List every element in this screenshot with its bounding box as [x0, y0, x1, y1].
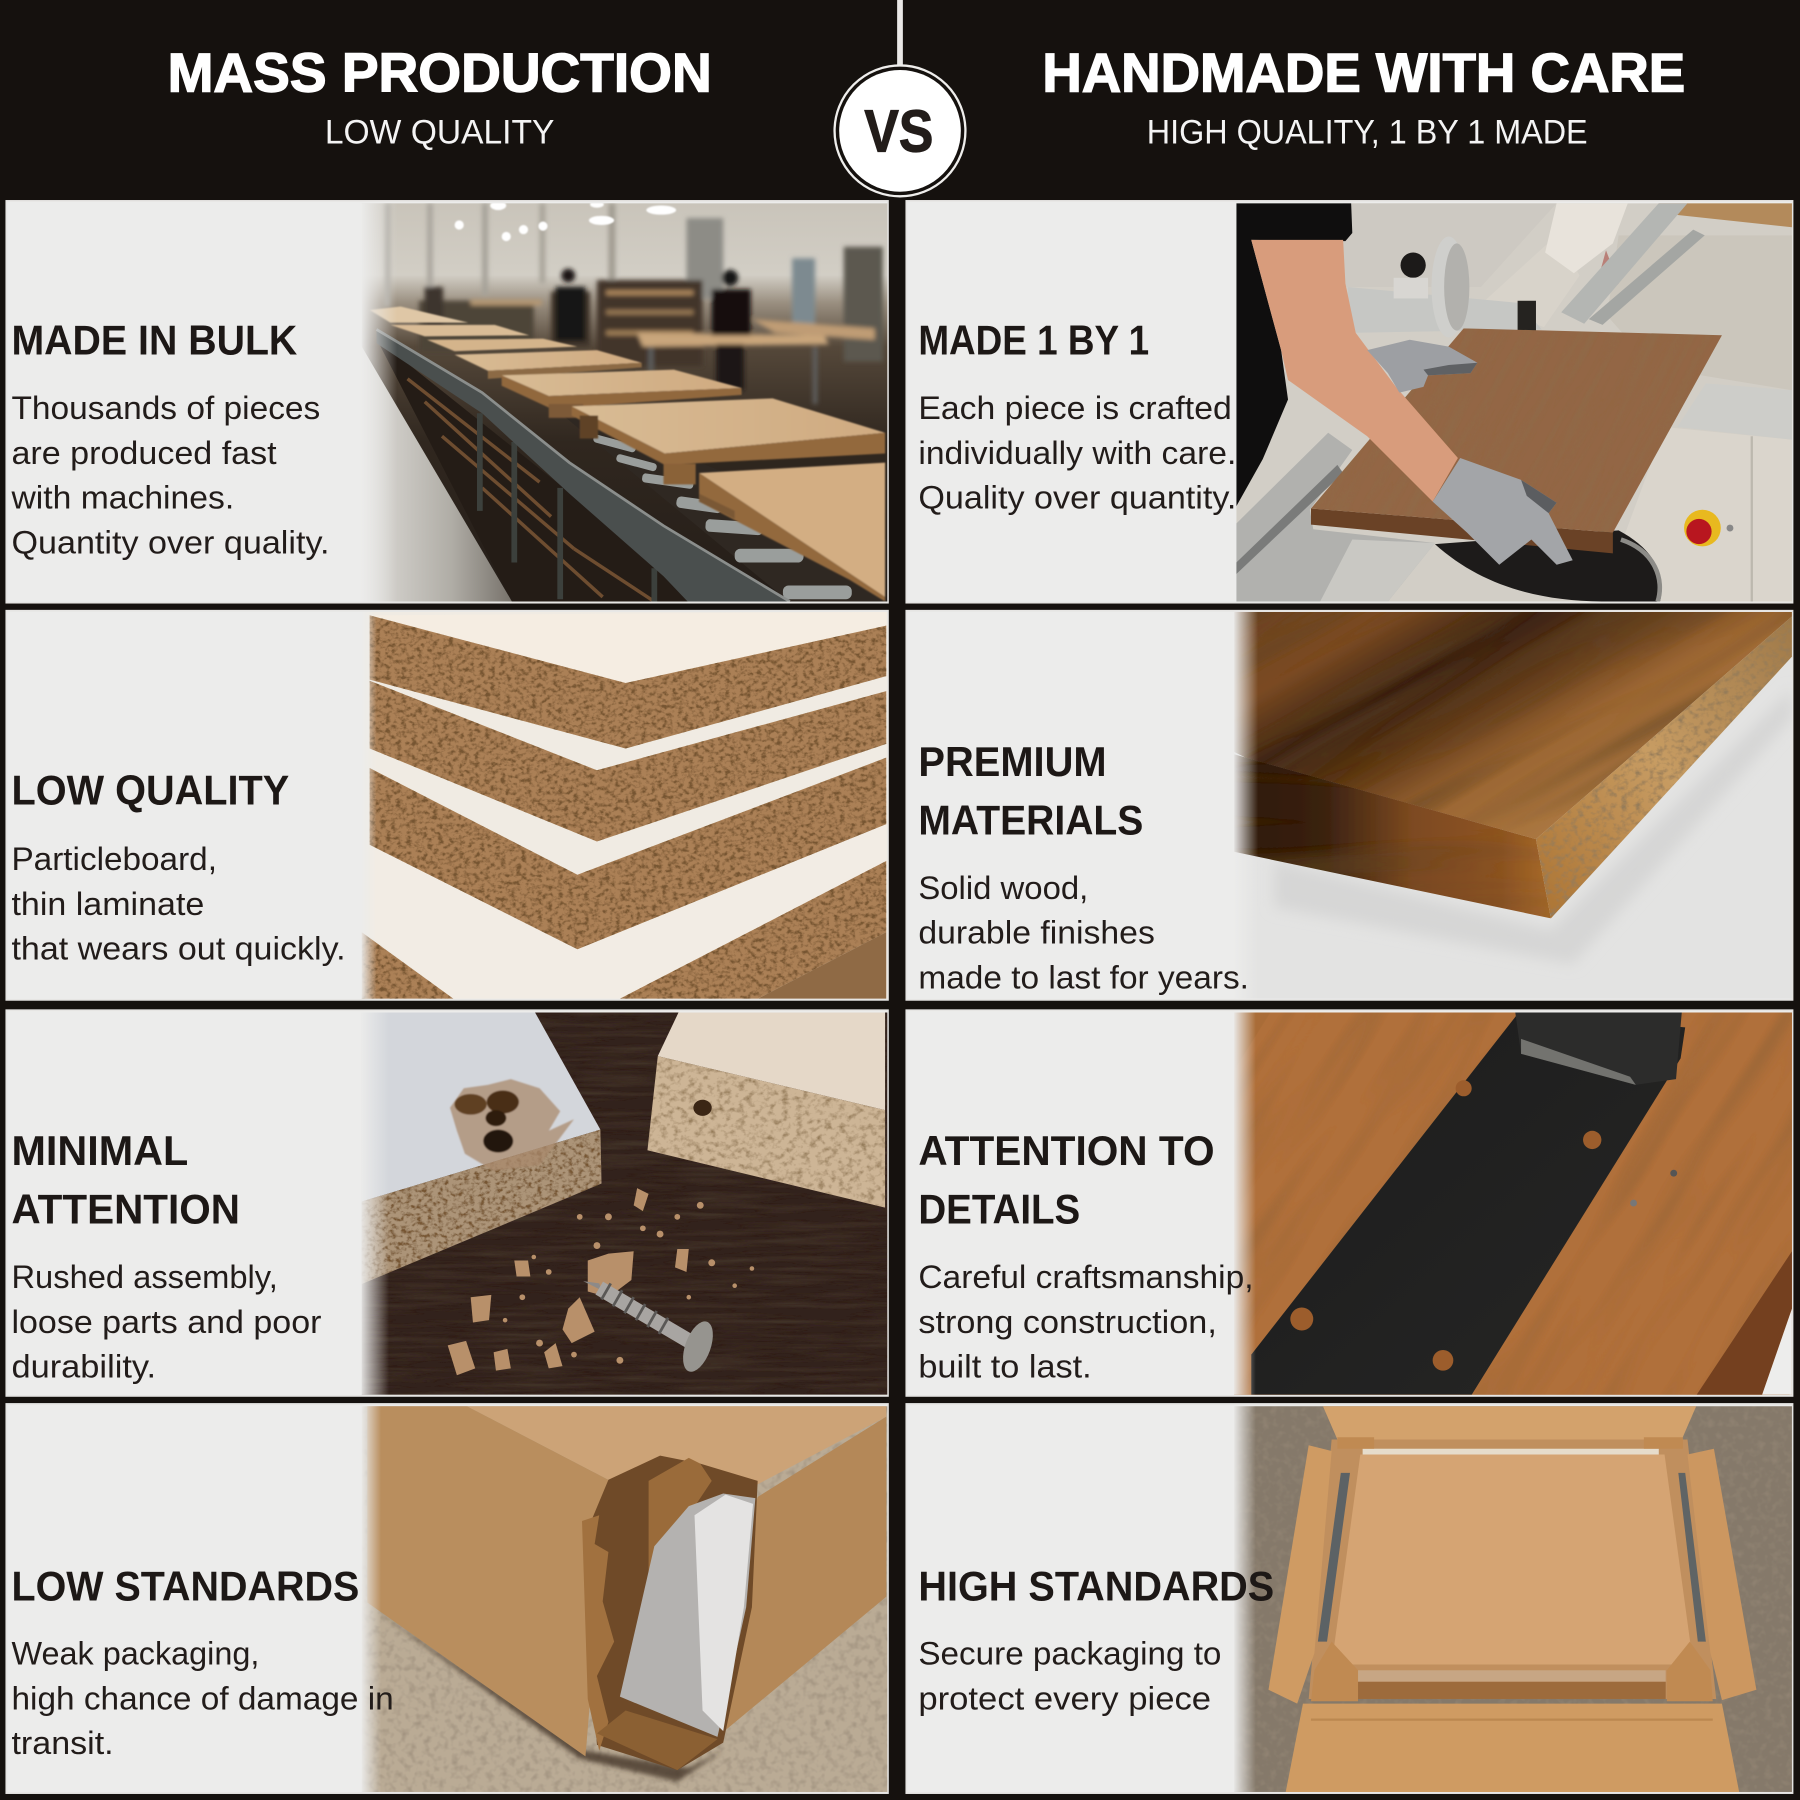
heading: high standards: HIGH STANDARDS — [918, 1563, 1274, 1609]
subheading: high quality: HIGH QUALITY, 1 BY 1 MADE — [1147, 113, 1588, 151]
rollers bed — [568, 418, 886, 602]
photo: damaged particleboard and loose screw — [360, 1010, 887, 1395]
bracket holes — [1290, 1080, 1601, 1371]
body text: attention to details — [918, 1259, 1254, 1385]
debris — [448, 1188, 754, 1375]
particleboard layer 2 — [370, 681, 886, 841]
torn cardboard — [585, 1456, 758, 1770]
photo: hands cutting walnut board on saw — [1236, 203, 1792, 602]
photo: metal bracket on wood — [1058, 671, 1800, 1693]
body text: made 1 by 1: Each piece is crafted — [918, 390, 1232, 426]
particleboard layer 1 — [370, 615, 886, 748]
arm — [1251, 240, 1458, 502]
body text: attention to details: strong construction, — [918, 1304, 1217, 1340]
heading: made in bulk: MADE IN BULK — [11, 318, 297, 364]
bottom flap — [1286, 1704, 1739, 1792]
shadow under box — [379, 1613, 723, 1782]
inner panel — [1332, 1454, 1693, 1665]
body text: low standards — [11, 1636, 394, 1761]
body text: made in bulk: with machines. — [10, 480, 234, 516]
heading: low quality: LOW QUALITY — [11, 768, 289, 814]
body text: low quality: that wears out quickly. — [11, 931, 346, 967]
body text: attention to details: Careful craftsmanship, — [918, 1259, 1254, 1295]
photo: secure open box — [1234, 1405, 1792, 1792]
body text: low standards: high chance of damage in — [11, 1680, 394, 1716]
box top face — [465, 1405, 886, 1484]
particleboard layer 3 — [370, 758, 886, 949]
photo: damaged cardboard box — [362, 1405, 887, 1792]
body text: premium materials: made to last for years. — [918, 959, 1249, 995]
walnut board — [1311, 509, 1613, 553]
body text: minimal attention — [11, 1259, 322, 1385]
body text: minimal attention: durability. — [11, 1349, 156, 1385]
subheading: low quality: LOW QUALITY — [325, 113, 554, 151]
top flap — [1322, 1405, 1697, 1440]
body text: low standards: transit. — [11, 1725, 114, 1761]
panel: made in bulk — [6, 201, 888, 603]
heading: minimal attention: ATTENTION — [11, 1187, 240, 1233]
body text: made 1 by 1: individually with care. — [918, 435, 1236, 471]
heading: premium materials — [918, 739, 1143, 844]
under-conveyor rack — [380, 346, 658, 602]
heading: mass production: MASS PRODUCTION — [168, 41, 712, 103]
heading: premium materials: MATERIALS — [918, 798, 1143, 844]
saw carriage — [1481, 235, 1580, 327]
heading: handmade with care: HANDMADE WITH CARE — [1042, 41, 1685, 103]
heading: attention to details: ATTENTION TO — [918, 1128, 1215, 1174]
body text: low standards: Weak packaging, — [11, 1636, 259, 1672]
panel: premium materials — [906, 308, 1800, 1093]
corner blocks — [1311, 1437, 1713, 1701]
heading: premium materials: PREMIUM — [918, 739, 1107, 785]
body text: made in bulk — [10, 390, 329, 560]
panel: low quality — [6, 611, 888, 1000]
body text: made 1 by 1 — [918, 390, 1236, 516]
motor — [1435, 530, 1662, 602]
glove on near hand — [1433, 458, 1573, 565]
floor — [360, 344, 512, 602]
boards — [370, 307, 885, 602]
saw table — [1236, 433, 1435, 602]
header: handmade with care — [1042, 41, 1685, 151]
body text: premium materials — [918, 870, 1249, 995]
panel: high standards — [906, 1404, 1793, 1793]
panel: attention to details — [906, 671, 1800, 1693]
photo fade — [360, 1405, 381, 1792]
white laminated board — [360, 1010, 600, 1202]
body text: minimal attention: Rushed assembly, — [11, 1259, 278, 1295]
photo fade — [1233, 1011, 1256, 1395]
photo fade — [360, 203, 397, 602]
laminate layer 4 — [370, 824, 886, 999]
panel: low standards — [6, 1404, 888, 1793]
photo: factory conveyor line — [360, 201, 887, 602]
photo: solid walnut slab corner — [1077, 308, 1800, 1093]
body text: low quality: Particleboard, — [11, 841, 217, 877]
glove on far hand — [1367, 340, 1477, 393]
heading: attention to details — [918, 1128, 1215, 1233]
body text: attention to details: built to last. — [918, 1349, 1092, 1385]
body text: premium materials: Solid wood, — [918, 870, 1088, 906]
inner box base — [1309, 1440, 1716, 1699]
black shirt and torso — [1236, 203, 1352, 506]
body text: high standards: protect every piece — [918, 1680, 1211, 1716]
left flap — [1268, 1445, 1332, 1704]
box left face — [367, 1405, 608, 1756]
front tape — [1358, 1670, 1666, 1682]
body text: made in bulk: are produced fast — [11, 435, 277, 471]
heading: made 1 by 1: MADE 1 BY 1 — [918, 318, 1149, 364]
photo fade — [1233, 1405, 1256, 1792]
photo fade — [359, 1011, 389, 1395]
photo: stacked particleboard — [362, 612, 887, 999]
panel: made 1 by 1 — [905, 200, 1794, 604]
black bracket — [1251, 1012, 1685, 1395]
body text: made in bulk: Quantity over quality. — [11, 524, 329, 560]
heading: attention to details: DETAILS — [918, 1187, 1080, 1233]
broken board — [658, 1010, 885, 1110]
header: mass production — [168, 41, 712, 151]
body text: high standards: Secure packaging to — [918, 1636, 1221, 1672]
divider line and VS badge — [835, 0, 965, 196]
dark packing gaps — [1318, 1473, 1350, 1642]
heading: minimal attention: MINIMAL — [11, 1128, 188, 1174]
heading: low standards: LOW STANDARDS — [11, 1563, 359, 1609]
body text: premium materials: durable finishes — [918, 915, 1155, 951]
photo fade — [1233, 612, 1258, 999]
photo fade — [360, 612, 377, 999]
VS label: VS — [864, 98, 933, 165]
body text: low quality: thin laminate — [11, 886, 204, 922]
screw — [583, 1281, 719, 1376]
panel: minimal attention — [6, 1010, 888, 1396]
body text: low quality — [11, 841, 346, 967]
emergency stop — [1684, 510, 1733, 546]
fence — [1348, 287, 1542, 333]
body text: made 1 by 1: Quality over quantity. — [918, 480, 1236, 516]
laminate damage — [450, 1079, 574, 1171]
right rail — [1677, 383, 1792, 440]
bubble wrap — [620, 1493, 755, 1737]
body text: made in bulk: Thousands of pieces — [11, 390, 320, 426]
heading: minimal attention — [11, 1128, 240, 1233]
conveyor side rail — [377, 329, 790, 602]
lights — [455, 201, 676, 241]
body text: minimal attention: loose parts and poor — [11, 1304, 322, 1340]
box right face — [677, 1417, 886, 1770]
right flap — [1688, 1449, 1756, 1700]
body text: high standards — [918, 1636, 1221, 1716]
